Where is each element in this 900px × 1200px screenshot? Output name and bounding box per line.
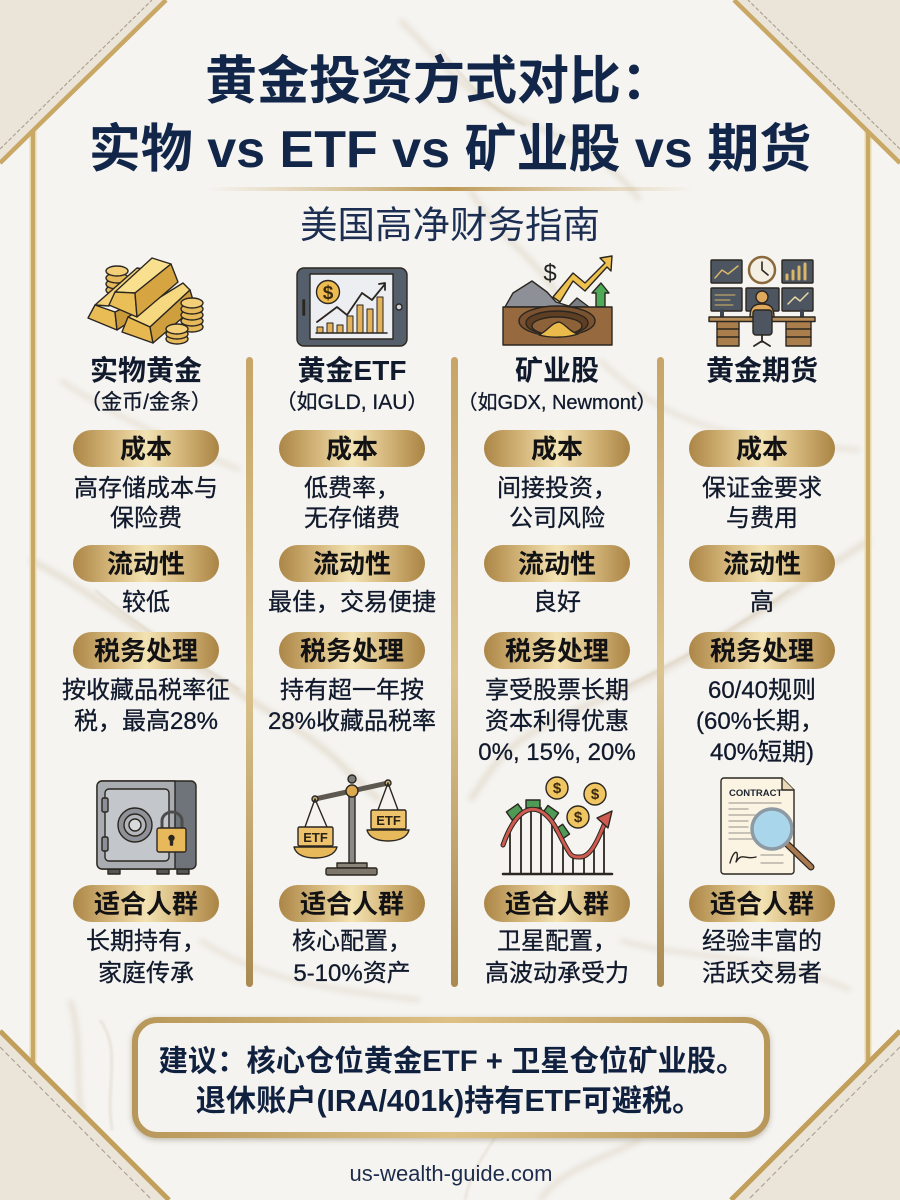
- cost text: 无存储费: [304, 505, 400, 532]
- tax pill: 税务处理: [300, 636, 404, 666]
- icon: contract with magnifying glass: [721, 778, 811, 874]
- tax text: 0%, 15%, 20%: [478, 739, 636, 766]
- coin dollar signs: $: [553, 780, 562, 797]
- audience text: 卫星配置，: [497, 928, 617, 955]
- tax text: (60%长期，: [696, 708, 824, 735]
- icon: tablet with chart: [297, 268, 407, 346]
- tax pill: 税务处理: [94, 636, 198, 666]
- liquidity text: 较低: [122, 589, 170, 616]
- scale labels: ETF: [303, 830, 328, 845]
- cost pill: [279, 430, 425, 467]
- audience pill: [279, 885, 425, 922]
- cost text: 间接投资，: [497, 475, 617, 502]
- icon: balance scale: [294, 775, 409, 875]
- panel: gold ETF: [268, 268, 436, 987]
- cost text: 公司风险: [509, 505, 605, 532]
- liquidity pill: [73, 545, 219, 582]
- icon: safe with padlock: [97, 781, 196, 874]
- cost pill: 成本: [326, 434, 378, 464]
- callout: recommendation: 建议：核心仓位黄金ETF + 卫星仓位矿业股。: [159, 1045, 745, 1078]
- column heading: 黄金期货: [706, 355, 818, 386]
- column heading: 黄金ETF: [298, 355, 406, 386]
- tax pill: [73, 632, 219, 669]
- audience pill: 适合人群: [94, 889, 198, 919]
- tax text: [268, 677, 436, 735]
- dollar sign: $: [543, 260, 557, 287]
- tax text: 28%收藏品税率: [268, 708, 436, 735]
- liquidity pill: [279, 545, 425, 582]
- liquidity pill: 流动性: [723, 549, 801, 579]
- website footer: us-wealth-guide.com: [350, 1161, 552, 1186]
- title: 实物 vs ETF vs 矿业股 vs 期货: [89, 121, 811, 179]
- liquidity text: 高: [750, 589, 774, 616]
- column heading: 实物黄金: [90, 355, 202, 386]
- tax text: 持有超一年按: [280, 677, 424, 704]
- dollar sign on coin: $: [323, 283, 334, 304]
- audience text: 5-10%资产: [293, 960, 411, 987]
- liquidity pill: [689, 545, 835, 582]
- leather corner: top left: [0, 0, 166, 163]
- scale labels: [303, 813, 401, 845]
- cost text: 低费率，: [304, 475, 400, 502]
- icon: gold bars and coins: [88, 258, 203, 344]
- tax text: 资本利得优惠: [485, 708, 629, 735]
- audience text: [485, 928, 629, 987]
- liquidity text: 最佳，交易便捷: [268, 589, 436, 616]
- audience text: [86, 928, 206, 987]
- cost text: [497, 475, 617, 532]
- tax text: 60/40规则: [708, 677, 816, 704]
- title divider: [205, 187, 695, 191]
- tax text: [696, 677, 824, 766]
- callout: recommendation: [135, 1020, 767, 1135]
- column heading: 矿业股: [515, 355, 599, 386]
- icon: open-pit mine with rising arrow: [503, 256, 612, 345]
- panel: gold futures: [689, 257, 835, 987]
- audience text: [702, 928, 822, 987]
- scale labels: ETF: [376, 813, 401, 828]
- panel: physical gold: [62, 258, 230, 987]
- title: [89, 39, 811, 179]
- audience pill: [73, 885, 219, 922]
- audience pill: 适合人群: [710, 889, 814, 919]
- tax text: 税，最高28%: [74, 708, 218, 735]
- liquidity pill: [484, 545, 630, 582]
- column subheading: （如GDX, Newmont）: [458, 391, 656, 414]
- cost pill: [689, 430, 835, 467]
- cost pill: [484, 430, 630, 467]
- cost pill: 成本: [531, 434, 583, 464]
- cost text: [702, 475, 822, 532]
- audience text: 活跃交易者: [702, 960, 822, 987]
- liquidity pill: 流动性: [313, 549, 391, 579]
- cost pill: [73, 430, 219, 467]
- audience text: 长期持有，: [86, 928, 206, 955]
- coin dollar signs: $: [591, 786, 600, 803]
- cost text: 高存储成本与: [74, 475, 218, 502]
- audience pill: [484, 885, 630, 922]
- tax text: 按收藏品税率征: [62, 677, 230, 704]
- tax pill: [484, 632, 630, 669]
- cost pill: 成本: [120, 434, 172, 464]
- callout: recommendation: 退休账户(IRA/401k)持有ETF可避税。: [196, 1084, 702, 1118]
- tax text: [62, 677, 230, 735]
- leather corner: bottom left: [0, 1031, 169, 1200]
- audience text: 核心配置，: [292, 928, 412, 955]
- gold inner frame: [33, 128, 868, 1067]
- coin dollar signs: $: [574, 809, 583, 826]
- tax text: [478, 677, 636, 766]
- tax pill: [279, 632, 425, 669]
- leather corner: bottom right: [731, 1031, 900, 1200]
- icon: rollercoaster with coins: [503, 777, 612, 874]
- column subheading: （如GLD, IAU）: [276, 391, 428, 414]
- audience text: [292, 928, 412, 987]
- tax text: 40%短期): [710, 739, 814, 766]
- liquidity pill: 流动性: [518, 549, 596, 579]
- cost pill: 成本: [736, 434, 788, 464]
- column subheading: （金币/金条）: [80, 391, 212, 414]
- tax text: 享受股票长期: [485, 677, 629, 704]
- audience pill: 适合人群: [300, 889, 404, 919]
- audience pill: [689, 885, 835, 922]
- cost text: 保险费: [110, 505, 182, 532]
- tax pill: 税务处理: [710, 636, 814, 666]
- panel: mining stocks: [458, 256, 656, 987]
- liquidity pill: 流动性: [107, 549, 185, 579]
- column dividers: [246, 357, 664, 987]
- contract label: CONTRACT: [729, 788, 782, 799]
- audience pill: 适合人群: [505, 889, 609, 919]
- coin dollar signs: [553, 780, 600, 826]
- audience text: 家庭传承: [98, 960, 194, 987]
- cost text: 与费用: [726, 505, 798, 532]
- leather corner: top right: [734, 0, 900, 163]
- tax pill: 税务处理: [505, 636, 609, 666]
- liquidity text: 良好: [533, 589, 581, 616]
- subtitle: 美国高净财务指南: [300, 194, 600, 249]
- cost text: 保证金要求: [702, 475, 822, 502]
- title: 黄金投资方式对比：: [205, 39, 673, 114]
- audience text: 高波动承受力: [485, 960, 629, 987]
- cost text: [74, 475, 218, 532]
- tax pill: [689, 632, 835, 669]
- audience text: 经验丰富的: [702, 928, 822, 955]
- cost text: [304, 475, 400, 532]
- icon: trader desk with monitors and clock: [709, 257, 815, 346]
